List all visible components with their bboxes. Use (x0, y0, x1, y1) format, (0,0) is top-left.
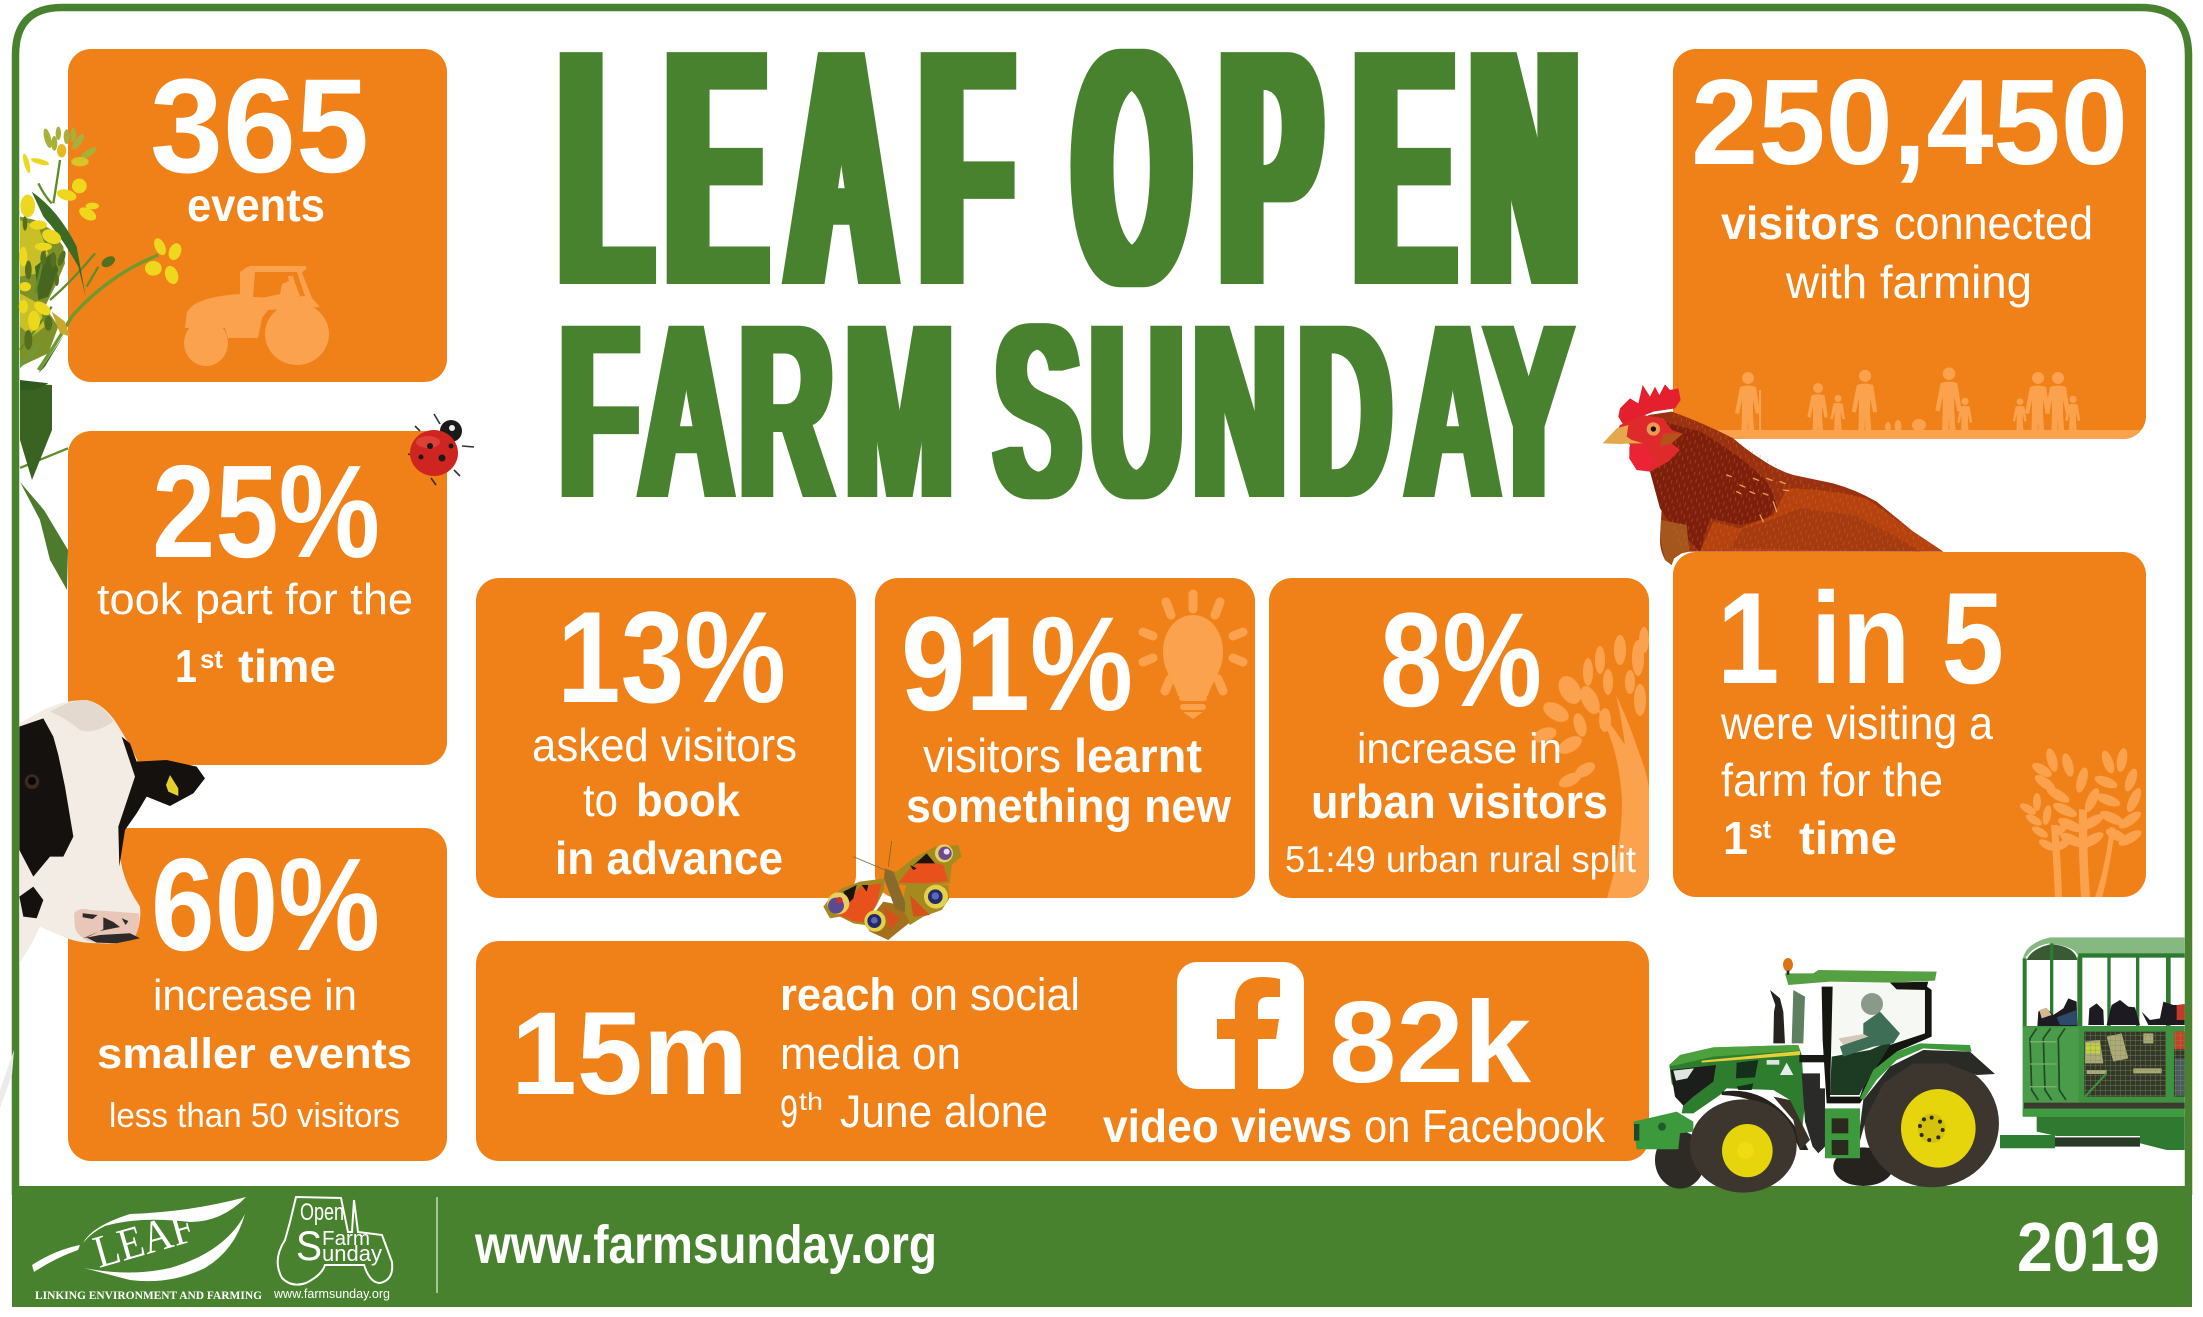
text: visitors connected (1721, 197, 2093, 249)
icon: family silhouettes on grass (1718, 367, 2148, 444)
text: increase in: increase in (153, 971, 357, 1020)
panel: 13% book in advance (476, 578, 856, 898)
text: to book: book (636, 774, 740, 826)
panel: 365 events (68, 49, 447, 382)
title line: FARM SUNDAY: FARM SUNDAY (560, 272, 1572, 551)
text: visitors learnt (923, 729, 1202, 782)
fender front (1722, 1091, 1808, 1150)
text: reach on social (780, 969, 1080, 1020)
stat: 15m: 15m (511, 988, 748, 1120)
vents and badges (1736, 1060, 1758, 1090)
text: took part for the: took part for the (97, 575, 413, 624)
plant: yellow flowers and leaves (19, 127, 184, 590)
stat: 250,450: 250,450 (1691, 54, 2128, 190)
panel background (875, 578, 1255, 898)
text: 1st time: st (1749, 814, 1771, 844)
text: 1st time: 1 (1723, 812, 1748, 864)
text: less than 50 visitors: less than 50 visitors (109, 1097, 400, 1135)
tank (1802, 1073, 1825, 1153)
text: visitors learnt: learnt (1074, 729, 1202, 782)
lower leaves (20, 383, 52, 480)
logo: LEAF (32, 1197, 262, 1302)
breast (1660, 520, 1689, 565)
text: farm for the: farm for the (1721, 754, 1943, 806)
body (1648, 412, 1943, 565)
hood (1669, 1045, 1805, 1150)
posts (2023, 943, 2171, 1028)
panel: 1 in 5 first visit (1673, 552, 2146, 898)
body (884, 868, 905, 912)
panel background (1673, 552, 2146, 897)
beak (1603, 425, 1643, 444)
dense flower cluster mass (20, 217, 65, 367)
mesh with passengers (2084, 1032, 2166, 1097)
year: 2019 (2017, 1208, 2160, 1286)
feather texture (1650, 412, 1943, 552)
text: 9th June alone: June alone (840, 1086, 1048, 1137)
panels (2023, 1026, 2185, 1117)
hay trailer (2000, 937, 2185, 1150)
text: 1st time (175, 640, 336, 692)
logo: Open Farm Sunday: Farm (322, 1228, 370, 1250)
ladybird (408, 414, 474, 485)
text: reach on social: on social (910, 969, 1080, 1020)
rear wheel (1864, 1059, 1999, 1187)
logo: Open Farm Sunday: www.farmsunday.org (273, 1286, 390, 1301)
faint shape at left margin (0, 1050, 14, 1108)
text: to book (583, 774, 740, 826)
text: media on: media on (780, 1028, 961, 1079)
nose (74, 909, 139, 944)
logo: LEAF: LEAF (88, 1200, 200, 1278)
website url: www.farmsunday.org (474, 1215, 937, 1275)
neck flecks (1727, 475, 1789, 522)
comb (1618, 384, 1681, 425)
icon: Facebook logo (1177, 962, 1304, 1089)
panel: social reach and video views (476, 941, 1649, 1161)
beacon (1783, 958, 1793, 971)
text: urban visitors: urban visitors (1311, 775, 1608, 828)
farm tractor (1633, 958, 1999, 1193)
stat: 91%: 91% (901, 590, 1133, 739)
text: 1st time: time (238, 640, 336, 692)
lower right wing (900, 883, 949, 925)
stat: 1 in 5: 1 in 5 (1717, 565, 2004, 711)
panel: 250,450 visitors (1673, 49, 2148, 444)
stat: 25%: 25% (152, 438, 380, 585)
hood shading (1650, 422, 1777, 552)
yellow petals (19, 153, 184, 331)
logo: Open Farm Sunday: Open (300, 1199, 344, 1226)
far wheels (1655, 1131, 1705, 1189)
divider (436, 1197, 438, 1293)
text: 1st time (1723, 812, 1897, 864)
label: events: events (187, 179, 325, 231)
text: visitors connected: connected (1894, 197, 2093, 249)
text: 9th June alone: th (799, 1088, 823, 1116)
exhaust (1770, 990, 1785, 1043)
text: with farming: with farming (1785, 256, 2032, 308)
stat: 82k: 82k (1329, 977, 1532, 1107)
panel background (68, 431, 447, 765)
icon: tractor silhouette (184, 266, 329, 366)
text: visitors learnt: visitors (923, 729, 1061, 782)
grille and headlight (1671, 1065, 1716, 1106)
title (560, 0, 1577, 551)
panel background (68, 828, 447, 1161)
hen (1603, 384, 1943, 565)
cow head (19, 700, 205, 963)
text: video views on Facebook: video views (1103, 1100, 1352, 1152)
butterfly (823, 841, 962, 940)
roof (1785, 970, 1937, 985)
text: to book: to (583, 774, 618, 826)
upper right wing (890, 845, 962, 885)
text: increase in: increase in (1357, 725, 1562, 773)
text: reach on social: reach (780, 969, 896, 1020)
stat: 365: 365 (150, 52, 369, 201)
logo: Open Farm Sunday: S (296, 1222, 322, 1269)
footer background (12, 1186, 2192, 1307)
text: were visiting a: were visiting a (1720, 697, 1993, 749)
text: visitors connected: visitors (1721, 197, 1880, 249)
logo: Open Farm Sunday (273, 1197, 392, 1301)
icon: tree silhouette (1531, 627, 1650, 898)
panel: 8% urban visitors (1269, 578, 1650, 898)
panel background (476, 578, 856, 898)
text: in advance: in advance (555, 832, 783, 884)
cab (1830, 983, 1930, 1055)
roof (2023, 937, 2185, 960)
text: video views on Facebook (1103, 1100, 1606, 1152)
text: 1st time: st (200, 644, 223, 674)
text: something new: something new (906, 779, 1231, 832)
text: smaller events: smaller events (97, 1030, 412, 1078)
panel: 25% first-timers (68, 431, 447, 765)
icon: wheat (2018, 747, 2144, 898)
panel background (1269, 578, 1649, 898)
panel: 91% learnt something new (875, 578, 1255, 898)
long leaf (32, 192, 86, 297)
panel: 60% smaller events (68, 828, 447, 1161)
panel background (1673, 49, 2146, 439)
text: 1st time: 1 (175, 640, 197, 692)
front wheel (1690, 1099, 1797, 1193)
icon: light bulb (1143, 594, 1243, 719)
text: video views on Facebook: on Facebook (1364, 1100, 1606, 1152)
lower left wing (865, 902, 910, 940)
stat: 8%: 8% (1380, 586, 1542, 735)
passengers (2037, 998, 2185, 1027)
upper left wing (823, 878, 885, 925)
logo: LEAF: LINKING ENVIRONMENT AND FARMING (35, 1290, 262, 1302)
floor and chassis (2024, 1103, 2185, 1109)
footer band (12, 1186, 2192, 1307)
text: 51:49 urban rural split: 51:49 urban rural split (1285, 839, 1637, 880)
steps (1825, 1108, 1860, 1158)
stat: 60%: 60% (151, 831, 380, 978)
text: 9th June alone: 9 (780, 1086, 798, 1137)
text: 1st time: time (1799, 812, 1897, 864)
bumper (1633, 1112, 1693, 1149)
antennae (853, 841, 892, 870)
text: asked visitors: asked visitors (532, 719, 797, 771)
driver (1861, 993, 1883, 1015)
rear fender (1857, 1050, 1995, 1153)
panel background (476, 941, 1649, 1161)
top buds (42, 127, 98, 161)
logo: Open Farm Sunday: unday (322, 1241, 382, 1266)
stat: 13%: 13% (557, 584, 786, 730)
dark buds in cluster (23, 216, 117, 350)
stems (38, 255, 158, 370)
panel background (68, 49, 447, 382)
face (1617, 415, 1682, 472)
